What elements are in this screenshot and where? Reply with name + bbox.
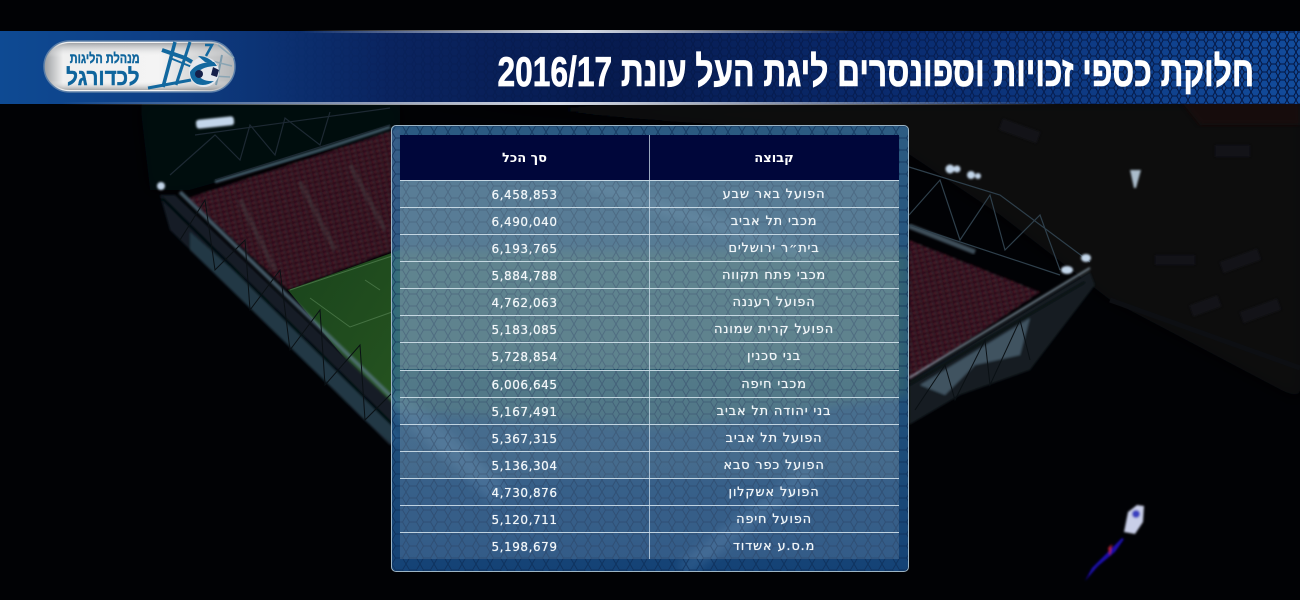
row: הפועל קרית שמונה [714,322,834,337]
logo text [66,50,140,90]
row: 6,490,040 [491,215,558,229]
top right truss [909,167,1090,275]
row [400,505,899,532]
stands left [188,128,400,290]
row [400,180,899,207]
row: 5,120,711 [491,513,558,527]
row: מ.ס.ע אשדוד [733,539,815,554]
pitch [288,250,400,425]
row: בית״ר ירושלים [728,241,820,256]
row: מכבי תל אביב [731,214,817,229]
table header row [400,135,899,180]
row [400,451,899,478]
row [400,261,899,288]
row: 5,884,788 [491,269,558,283]
row [400,288,899,315]
row: בני סכנין [747,349,801,364]
row: מכבי פתח תקווה [722,268,826,283]
roof beams [215,127,390,182]
row [400,424,899,451]
row: הפועל אשקלון [728,485,820,500]
top left truss [170,108,390,180]
row: 5,183,085 [491,323,558,337]
row [400,370,899,397]
row: הפועל תל אביב [726,431,822,446]
row: 6,193,765 [491,242,558,256]
row: 5,367,315 [491,432,558,446]
row [400,207,899,234]
row [400,397,899,424]
table header row: קבוצה [754,151,794,166]
floodlights [157,116,1141,274]
row [400,234,899,261]
stand aisles [240,165,385,270]
right side truss [909,268,1095,425]
title: חלוקת כספי זכויות וספונסרים ליגת העל עונת 2016/17 [497,48,1254,95]
row: 5,728,854 [491,350,558,364]
table: team payouts [400,135,899,559]
row: הפועל חיפה [736,512,812,527]
row: מכבי חיפה [741,377,807,392]
row: 4,730,876 [491,486,558,500]
row: הפועל כפר סבא [723,458,825,473]
row: בני יהודה תל אביב [717,404,831,419]
row: 5,167,491 [491,405,558,419]
table header row: סך הכל [502,151,547,166]
row [400,532,899,559]
row [400,342,899,369]
stands right [909,240,1040,380]
row: 5,198,679 [491,540,558,554]
small player silhouette [1085,505,1144,581]
row: הפועל רעננה [732,295,816,310]
logo text: מנהלת הליגות [70,50,140,66]
row: 4,762,063 [491,296,558,310]
row: הפועל באר שבע [723,187,825,202]
row [400,315,899,342]
panel: table backing [391,125,909,572]
row: 5,136,304 [491,459,558,473]
parked cars and lights [999,118,1281,323]
surroundings [400,104,1300,400]
row: 6,458,853 [491,188,558,202]
logo text: לכדורגל [67,64,140,90]
header band [0,30,1300,105]
row [400,478,899,505]
left side truss [160,192,400,450]
row: 6,006,645 [491,378,558,392]
